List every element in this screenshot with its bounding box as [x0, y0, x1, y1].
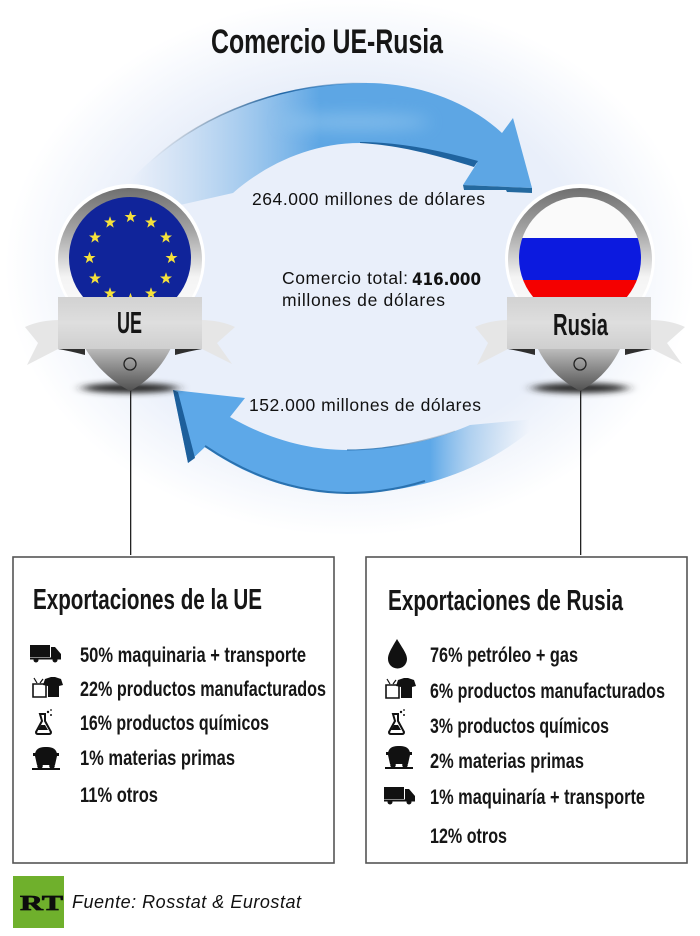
Russia label: Rusia — [553, 307, 608, 342]
row: machinery: 50% maquinaria + transporte — [80, 644, 306, 667]
arrow: EU to Russia — [128, 83, 532, 205]
EU flag — [69, 197, 191, 319]
row: machinery — [30, 644, 306, 667]
row: chemicals: 16% productos químicos — [80, 712, 269, 735]
arrow: Russia to EU — [173, 390, 545, 493]
row: chemicals — [36, 709, 269, 735]
label: 152.000: 152.000 millones de dólares — [249, 395, 481, 415]
row: raw materials: 2% materias primas — [430, 750, 584, 773]
connector line: EU — [130, 370, 131, 555]
Russian flag — [519, 197, 641, 297]
row: chemicals — [389, 709, 609, 738]
source: Fuente: Rosstat & Eurostat — [72, 892, 302, 912]
row: manufactured — [33, 677, 326, 701]
heading: EU exports: Exportaciones de la UE — [33, 584, 262, 616]
title: Comercio UE-Rusia — [211, 23, 444, 61]
label: total trade — [282, 268, 481, 310]
row: oil and gas: 76% petróleo + gas — [430, 644, 578, 667]
connector line: Russia — [580, 370, 581, 555]
row: oil and gas — [388, 639, 578, 668]
logo: RT — [13, 876, 64, 928]
background glow — [0, 0, 700, 560]
row: chemicals: 3% productos químicos — [430, 715, 609, 738]
row: other: 11% otros — [80, 784, 158, 807]
panel: EU exports — [13, 557, 334, 863]
label: 264.000: 264.000 millones de dólares — [252, 189, 485, 209]
pin: EU — [25, 184, 235, 393]
label: total trade: millones de dólares — [282, 290, 445, 310]
row: machinery — [384, 786, 645, 809]
row: machinery: 1% maquinaría + transporte — [430, 786, 645, 809]
row: raw materials — [32, 747, 235, 770]
label: total trade: 416.000 — [412, 270, 481, 289]
label: total trade: Comercio total: — [282, 268, 408, 288]
row: raw materials — [385, 746, 584, 773]
logo: RT: RT — [20, 891, 63, 915]
row: other: 12% otros — [430, 825, 507, 848]
row: manufactured: 22% productos manufacturados — [80, 678, 326, 701]
row: raw materials: 1% materias primas — [80, 747, 235, 770]
panel: Russia exports — [366, 557, 687, 863]
row: manufactured — [386, 678, 665, 703]
pin: Russia — [475, 184, 685, 393]
EU label: UE — [117, 305, 142, 340]
